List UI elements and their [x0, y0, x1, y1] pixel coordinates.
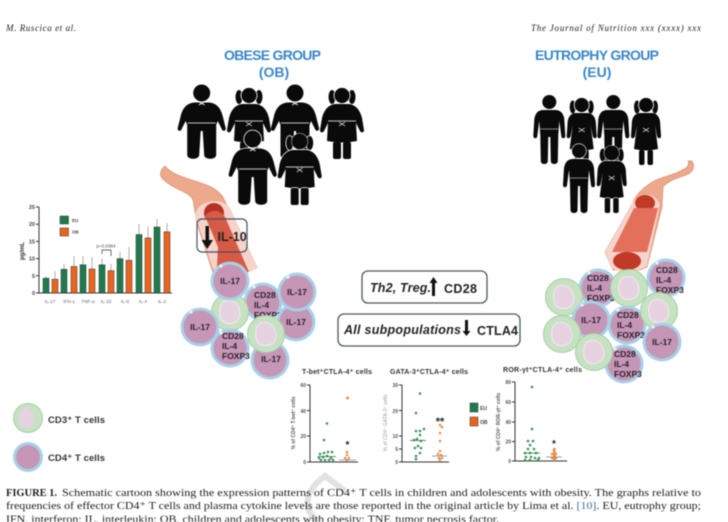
cell cluster: eutrophy group: CD28 [656, 265, 678, 275]
bar chart: plasma cytokines: IL-6 [121, 299, 129, 305]
callout: Th2 Treg CD28 up [362, 271, 487, 303]
watermark arc [307, 476, 345, 522]
dot plot: T-bet CTLA-4: % of CD4⁺ T-bet⁺ cells [291, 396, 297, 450]
bar chart: plasma cytokines: 0 [32, 291, 35, 297]
dot plot: ROR-gamma-t CTLA-4: * [552, 439, 556, 450]
bar chart: plasma cytokines: 10 [29, 256, 35, 262]
dot plot: T-bet CTLA-4: 0 [303, 460, 306, 466]
dot plot: ROR-gamma-t CTLA-4 [496, 367, 582, 465]
cell cluster: obese group: CD28 [254, 290, 276, 300]
bar chart: plasma cytokines: p=0.0384 [97, 244, 116, 248]
bar chart: plasma cytokines: pg/mL [20, 242, 26, 260]
cell cluster: eutrophy group [544, 258, 686, 384]
heading: eutrophy group: (EU) [583, 64, 611, 80]
dot plot: GATA-3 CTLA-4: 5 [395, 447, 398, 453]
dot plot: T-bet CTLA-4: 60 [300, 383, 306, 389]
cell cluster: obese group: IL-17 [287, 287, 307, 297]
legend: CD3 T cells [14, 404, 105, 432]
chart legend: EU [72, 218, 78, 223]
legend: dot plot groups: EU [480, 406, 487, 412]
heading: obese group [224, 47, 321, 80]
callout: Th2 Treg CD28 up: Th2, Treg. [370, 281, 431, 295]
blood vessel: obese group [160, 166, 258, 277]
chart legend: OB [72, 230, 80, 234]
cell cluster: eutrophy group: CD28 [617, 310, 639, 320]
cell cluster: obese group: IL-17 [286, 317, 306, 327]
legend: dot plot groups [470, 403, 488, 426]
legend: dot plot groups: OB [480, 420, 488, 426]
dot plot: GATA-3 CTLA-4: 30 [392, 383, 398, 389]
icon group: obese children [178, 84, 364, 205]
bar chart: plasma cytokines: 25 [29, 205, 35, 211]
dot plot: ROR-gamma-t CTLA-4: ROR-γt⁺CTLA-4⁺ cells [503, 367, 582, 374]
figure caption: Schematic cartoon showing the expression patterns of CD4⁺ T cells in children and adolescents with obesity. The graphs relative to [62, 488, 701, 499]
figure caption: frequencies of effector CD4⁺ T cells and plasma cytokine levels are those reported in the original article by Lima et al. [10]. EU, eutrophy group; [6, 501, 701, 512]
cell cluster: obese group [180, 262, 316, 380]
cell cluster: eutrophy group: IL-4 [614, 359, 629, 369]
dot plot: T-bet CTLA-4: * [346, 440, 350, 451]
callout: IL-10 decrease: IL-10 [218, 230, 247, 244]
callout: Th2 Treg CD28 up: CD28 [444, 282, 477, 296]
heading: eutrophy group [535, 47, 659, 80]
dot plot: GATA-3 CTLA-4: 10 [392, 434, 398, 440]
dot plot: GATA-3 CTLA-4: GATA-3⁺CTLA-4⁺ cells [390, 369, 468, 376]
cell cluster: obese group: IL-17 [261, 354, 281, 364]
dot plot: GATA-3 CTLA-4: 20 [392, 409, 398, 415]
bar chart: plasma cytokines [20, 205, 172, 305]
bar chart: plasma cytokines: 20 [29, 222, 35, 228]
bar chart: plasma cytokines: IL-4 [139, 299, 147, 305]
cell cluster: eutrophy group: CD28 [587, 273, 609, 283]
legend: CD3 T cells: CD3⁺ T cells [48, 415, 105, 426]
cell cluster: eutrophy group: IL-17 [652, 337, 672, 347]
dot plot: T-bet CTLA-4: 40 [300, 409, 306, 415]
cell cluster: eutrophy group: IL-4 [656, 275, 671, 285]
cell cluster: eutrophy group: FOXP3 [614, 369, 642, 379]
cell cluster: eutrophy group: FOXP3 [617, 330, 645, 340]
error bars [46, 219, 167, 279]
cell cluster: eutrophy group: CD28 [614, 349, 636, 359]
dot plot: GATA-3 CTLA-4 [383, 369, 468, 466]
page header: authors: M. Ruscica et al. [5, 23, 76, 33]
cell cluster: eutrophy group: FOXP3 [587, 293, 615, 303]
figure caption: FIGURE 1. [6, 488, 57, 499]
cell cluster: eutrophy group: FOXP3 [656, 285, 684, 295]
bar chart: plasma cytokines: 15 [29, 240, 35, 246]
legend: CD4 T cells [13, 442, 105, 472]
dot plot: T-bet CTLA-4: T-bet⁺CTLA-4⁺ cells [302, 369, 372, 376]
dot plot: ROR-gamma-t CTLA-4: 80 [505, 380, 511, 386]
dot plot: T-bet CTLA-4: 20 [300, 434, 306, 440]
cell cluster: obese group: FOXP3 [254, 310, 282, 320]
dot plot: ROR-gamma-t CTLA-4: 40 [505, 420, 511, 426]
cell cluster: obese group: IL-17 [190, 322, 210, 332]
bar chart: plasma cytokines: IL-17 [45, 299, 56, 305]
chart legend [60, 216, 80, 236]
cell cluster: obese group: IL-17 [220, 276, 240, 286]
dot plot: ROR-gamma-t CTLA-4: 60 [505, 400, 511, 406]
dot plot: ROR-gamma-t CTLA-4: % of CD4⁺ ROR-γt⁺ cells [496, 393, 502, 451]
bar chart: plasma cytokines: IL-2 [158, 299, 166, 305]
bar chart: plasma cytokines: TNF-α [81, 299, 95, 305]
page header: journal: The Journal of Nutrition xxx (xxxx) xxx [531, 23, 701, 33]
bar chart: plasma cytokines: IL-10 [101, 299, 112, 305]
dot plot: GATA-3 CTLA-4: 0 [395, 460, 398, 466]
heading: eutrophy group: EUTROPHY GROUP [535, 47, 659, 63]
dot plot: ROR-gamma-t CTLA-4: 0 [508, 459, 511, 465]
heading: obese group: OBESE GROUP [224, 47, 321, 63]
bar chart: plasma cytokines: IFN-γ [63, 299, 75, 305]
dot plot: ROR-gamma-t CTLA-4: 20 [505, 440, 511, 446]
legend: CD4 T cells: CD4⁺ T cells [48, 453, 105, 464]
dot plot: T-bet CTLA-4 [291, 369, 372, 466]
cell cluster: eutrophy group: IL-4 [617, 320, 632, 330]
cell cluster: obese group: IL-4 [222, 341, 237, 351]
blood vessel: eutrophy group [605, 161, 694, 272]
callout: all subpopulations CTLA4 down [338, 314, 520, 346]
cell cluster: obese group: CD28 [222, 331, 244, 341]
cell cluster: obese group: FOXP3 [222, 351, 250, 361]
dot plot: GATA-3 CTLA-4: % of CD4⁺ GATA-3⁺ cells [383, 394, 389, 451]
icon group: eutrophic children [533, 95, 661, 213]
cell cluster: eutrophy group: IL-17 [581, 315, 601, 325]
dot plot: GATA-3 CTLA-4: ** [436, 416, 445, 428]
callout: all subpopulations CTLA4 down: All subpopulations [343, 323, 461, 337]
cell cluster: obese group: IL-4 [254, 300, 269, 310]
figure caption [6, 488, 701, 522]
heading: obese group: (OB) [259, 64, 289, 80]
cell cluster: eutrophy group: IL-4 [587, 283, 602, 293]
callout: all subpopulations CTLA4 down: CTLA4 [477, 324, 518, 338]
bar chart: plasma cytokines: 5 [32, 274, 35, 280]
callout: IL-10 decrease [197, 219, 247, 252]
